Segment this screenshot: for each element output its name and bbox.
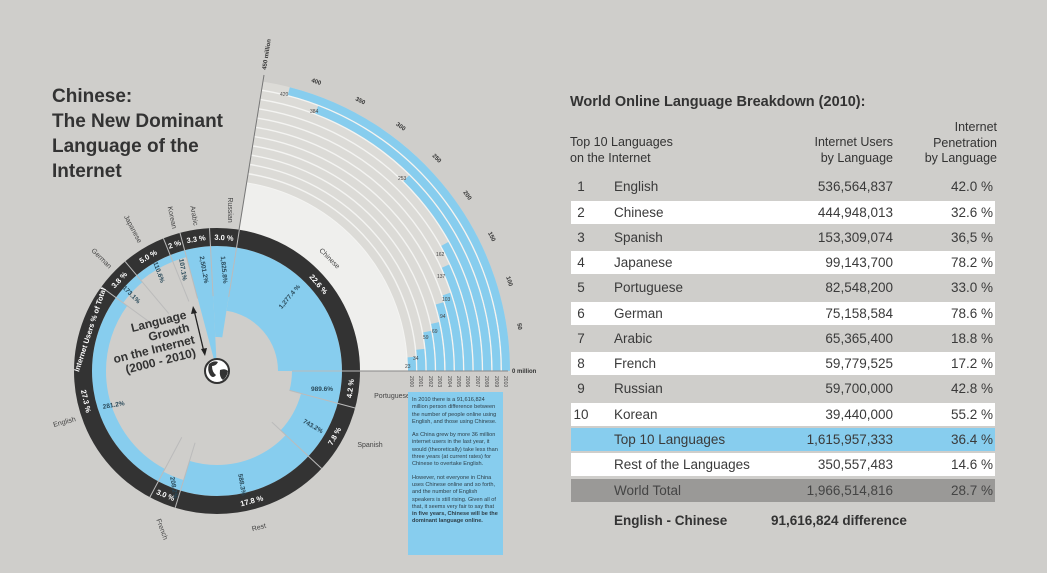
table rows: 2 [577, 204, 585, 220]
language names: Korean [166, 206, 177, 230]
title: The New Dominant [52, 111, 223, 132]
table rows: 28.7 % [951, 483, 993, 498]
table rows: 8 [577, 356, 585, 371]
title [52, 86, 223, 182]
table rows: English - Chinese [614, 513, 727, 528]
ring share labels: 3.0 % [155, 487, 176, 503]
fan: Chinese users growth 2000-2010: 137 [437, 274, 446, 280]
language names: Japanese [122, 214, 143, 244]
table title: World Online Language Breakdown (2010): [570, 94, 865, 110]
language names: German [90, 248, 113, 270]
fan: Chinese users growth 2000-2010: 420 [280, 92, 289, 98]
growth title text: on the Internet [112, 332, 196, 366]
table header: on the Internet [570, 150, 651, 164]
fan: Chinese users growth 2000-2010: 2008 [483, 376, 489, 387]
ring share labels: 17.8 % [239, 493, 265, 508]
fan: Chinese users growth 2000-2010: 2006 [464, 376, 470, 387]
language names: Russian [226, 197, 233, 223]
language names: Arabic [188, 205, 199, 227]
ring share labels: 22.6 % [308, 272, 330, 296]
growth % labels: 110.6% [151, 261, 165, 284]
fan: Chinese users growth 2000-2010 [0, 38, 537, 573]
fan: Chinese users growth 2000-2010: 34 [413, 356, 419, 362]
title: Chinese: [52, 86, 132, 107]
table rows: 17.2 % [951, 356, 993, 371]
fan: Chinese users growth 2000-2010: 23 [405, 364, 411, 370]
fan: Chinese users growth 2000-2010: 450 million [262, 38, 273, 70]
table rows: 33.0 % [951, 280, 993, 295]
growth % labels: 1,277.4 % [278, 283, 302, 311]
table rows: 4 [577, 255, 585, 270]
table rows: German [614, 306, 663, 320]
language names: Rest [251, 523, 267, 533]
table rows: 42.8 % [951, 381, 993, 396]
ring share labels: 7.8 % [326, 425, 343, 447]
ring share labels: 27.3 % [79, 389, 93, 414]
ring share labels [72, 233, 356, 508]
fan: Chinese users growth 2000-2010: 100 [504, 276, 513, 288]
table rows: 65,365,400 [825, 330, 893, 346]
table rows: 6 [577, 306, 585, 320]
table rows: 1 [577, 179, 585, 194]
table rows: 350,557,483 [818, 457, 893, 472]
table header: by Language [821, 150, 893, 164]
fan: Chinese users growth 2000-2010: 150 [486, 231, 496, 243]
table rows: 7 [577, 330, 585, 346]
fan: Chinese users growth 2000-2010: 59 [423, 335, 429, 341]
title: Language of the [52, 136, 199, 157]
ring share labels: Internet Users % of Total [72, 287, 108, 373]
table header: Penetration [933, 136, 997, 150]
table rows: 75,158,584 [825, 306, 893, 320]
table rows: 59,779,525 [825, 356, 893, 371]
fan: Chinese users growth 2000-2010: 400 [310, 78, 322, 87]
table rows: 78.2 % [951, 255, 993, 270]
fan: Chinese users growth 2000-2010: 162 [436, 252, 445, 258]
growth % labels [102, 256, 333, 499]
table rows: 444,948,013 [818, 204, 893, 220]
table rows: 153,309,074 [818, 230, 893, 244]
growth % labels: 989.6% [311, 386, 333, 393]
growth title text: Language [129, 308, 188, 335]
chart: language circle and Chinese growth fan [53, 38, 537, 541]
title: Internet [52, 161, 122, 182]
fan: Chinese users growth 2000-2010: 2007 [474, 376, 480, 387]
growth title text [106, 307, 199, 379]
fan: Chinese users growth 2000-2010: 94 [440, 314, 446, 320]
table rows: 3 [577, 230, 585, 244]
table rows: 32.6 % [951, 204, 993, 220]
table rows: 78.6 % [951, 306, 993, 320]
table rows: 1,966,514,816 [807, 483, 893, 498]
fan: Chinese users growth 2000-2010: 0 million [512, 369, 537, 375]
table rows: Portuguese [614, 280, 683, 295]
ring share labels: 4.2 % [345, 378, 356, 399]
language names: English [53, 416, 77, 429]
language names: Spanish [357, 442, 383, 449]
language names [53, 197, 410, 541]
callout text box [408, 392, 503, 555]
table rows: 91,616,824 difference [771, 513, 907, 528]
table header: Internet Users [814, 135, 893, 149]
table rows: 36.4 % [951, 432, 993, 447]
fan: Chinese users growth 2000-2010: 2004 [446, 376, 452, 387]
fan: Chinese users growth 2000-2010: 200 [461, 190, 472, 202]
table rows: 18.8 % [951, 330, 993, 346]
arrow: double headed [191, 306, 207, 356]
fan: Chinese users growth 2000-2010: 2003 [436, 376, 442, 387]
table header [570, 120, 997, 165]
table rows: Top 10 Languages [614, 432, 725, 447]
callout text box: However, not everyone in China uses Chinese online and so forth, and the number of English speakers is still rising. Given all of that, it seems very fair to say that in five years, Chinese will be the dominant language online. [412, 475, 498, 524]
language names: French [154, 518, 168, 541]
fan: Chinese users growth 2000-2010: 2010 [502, 376, 508, 387]
growth % labels: 743.2% [301, 418, 324, 435]
fan: Chinese users growth 2000-2010: 50 [515, 323, 522, 331]
table rows: French [614, 356, 656, 371]
fan: Chinese users growth 2000-2010: 2002 [427, 376, 433, 387]
circle: dark share ring [83, 237, 351, 505]
fan: Chinese users growth 2000-2010: 103 [442, 297, 451, 303]
fan: Chinese users growth 2000-2010: 69 [432, 329, 438, 335]
ring share labels: 3.3 % [186, 233, 207, 245]
table rows: 99,143,700 [825, 255, 893, 270]
table rows: 42.0 % [951, 179, 993, 194]
fan: Chinese users growth 2000-2010: 384 [310, 109, 319, 115]
ring share labels: 2 % [167, 238, 183, 251]
growth % labels: 173.1% [121, 285, 141, 305]
fan: Chinese users growth 2000-2010: 253 [398, 176, 407, 182]
table rows: 9 [577, 381, 585, 396]
fan: Chinese users growth 2000-2010: 2000 [408, 376, 414, 387]
circle: growth wedges [96, 250, 338, 492]
growth title text: (2000 - 2010) [124, 346, 197, 377]
table rows: 14.6 % [951, 457, 993, 472]
ring share labels: 5.0 % [138, 248, 159, 265]
table rows: Japanese [614, 255, 673, 270]
growth % labels: 1,825.8% [219, 256, 228, 284]
ring share labels: 3.0 % [214, 233, 234, 243]
table rows: World Total [614, 483, 681, 498]
table rows: Chinese [614, 204, 664, 220]
fan: Chinese users growth 2000-2010: 300 [395, 122, 407, 133]
table rows: Korean [614, 406, 658, 422]
icon: globe [205, 359, 229, 383]
growth % labels: 107.1% [177, 258, 188, 281]
table rows: 55.2 % [951, 406, 993, 422]
table rows: 5 [577, 280, 585, 295]
table header: by Language [925, 151, 997, 165]
growth % labels: 588.3% [236, 473, 247, 496]
table rows: 59,700,000 [825, 381, 893, 396]
growth title text: Growth [147, 320, 191, 344]
callout text box: As China grew by more 36 million internet users in the last year, it would (theoretically) take less than three years (at current rates) for Chinese to overtake English. [412, 432, 498, 467]
fan: Chinese users growth 2000-2010: 350 [354, 97, 366, 107]
table rows: English [614, 179, 658, 194]
table rows: Russian [614, 381, 663, 396]
language names: Chinese [318, 247, 341, 271]
fan: Chinese users growth 2000-2010: 2005 [455, 376, 461, 387]
table header: Internet [955, 120, 997, 134]
table rows: 1,615,957,333 [807, 432, 893, 447]
table rows: Spanish [614, 230, 663, 244]
table rows: 39,440,000 [825, 406, 893, 422]
growth % labels: 208.2% [168, 476, 179, 499]
table rows: 36,5 % [951, 230, 993, 244]
table header: Top 10 Languages [570, 135, 673, 149]
growth % labels: 2,501.2% [198, 256, 209, 284]
table rows: 82,548,200 [825, 280, 893, 295]
growth % labels: 281.2% [102, 400, 125, 411]
ring share labels: 3.8 % [110, 270, 129, 290]
fan: Chinese users growth 2000-2010: 2001 [417, 376, 423, 387]
language names: Portuguese [374, 393, 410, 400]
fan: Chinese users growth 2000-2010: 250 [431, 153, 442, 165]
table rows: Rest of the Languages [614, 457, 750, 472]
fan: Chinese users growth 2000-2010: 2009 [493, 376, 499, 387]
table rows: Arabic [614, 330, 652, 346]
callout text box: In 2010 there is a 91,616,824 million person difference between the number of people online using English, and those using Chinese. [412, 397, 497, 425]
table rows: 536,564,837 [818, 179, 893, 194]
table rows: 10 [573, 406, 589, 422]
